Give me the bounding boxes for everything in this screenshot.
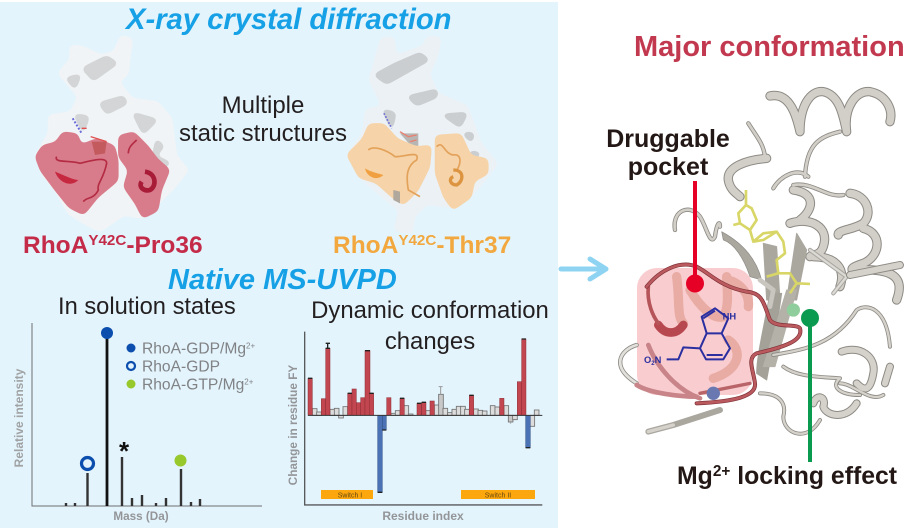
chart: change in residue FY bars: [286, 332, 542, 523]
label: RhoA Y42C-Pro36: RhoAY42C-Pro36: [23, 232, 203, 259]
pointer: druggable pocket: [686, 181, 704, 292]
inhibitor molecule: NH: [723, 312, 736, 322]
axis label: Mass (Da): Mass (Da): [113, 510, 169, 523]
chart: mass spectrum: [12, 323, 262, 523]
axis label: Residue index: Residue index: [382, 509, 464, 523]
heading: In solution states: In solution states: [58, 294, 236, 320]
label: Mg2+ locking effect: Mg2+ locking effect: [677, 463, 897, 490]
inhibitor molecule: [644, 303, 800, 400]
inhibitor molecule: N: [655, 355, 662, 365]
pocket highlight: [637, 268, 753, 395]
label bar: Switch II: [461, 490, 535, 500]
panel: methods background: [0, 2, 558, 528]
heading: Dynamic conformation changes: changes: [385, 328, 475, 355]
marker: star: *: [119, 436, 130, 466]
label: Druggable pocket: pocket: [628, 153, 708, 181]
protein structure: major conformation ribbon: [620, 92, 900, 434]
grey ribbons lower: [620, 265, 900, 434]
text: multiple static structures: Multiple: [222, 92, 304, 119]
legend: RhoA-GDP/Mg: [142, 340, 246, 358]
legend: [126, 340, 255, 394]
ligand: yellow GDP sticks: [733, 190, 810, 293]
legend: 2+: [244, 378, 254, 386]
protein structure: RhoA Y42C-Pro36 surface: [37, 37, 187, 230]
label: RhoA Y42C-Thr37: RhoAY42C-Thr37: [333, 232, 511, 259]
legend: 2+: [246, 342, 255, 350]
label: Druggable pocket: Druggable: [606, 125, 730, 153]
marker: GDP/Mg2+ peak: [101, 327, 113, 339]
pocket pale ribbons: [637, 265, 800, 403]
grey ribbons upper: [675, 92, 899, 300]
arrow: to major conformation: [561, 259, 606, 279]
inhibitor molecule: O: [644, 355, 651, 365]
marker: GTP/Mg2+ peak: [174, 454, 186, 466]
label bar: Switch II: Switch II: [485, 492, 511, 500]
legend: RhoA-GDP: [142, 358, 220, 376]
pointer: Mg2+ locking: [801, 309, 819, 462]
title: X-ray crystal diffraction: X-ray crystal diffraction: [126, 4, 452, 36]
label bar: Switch I: [321, 490, 373, 500]
inhibitor molecule: 2: [651, 361, 655, 367]
legend: RhoA-GTP/Mg: [142, 376, 244, 394]
label bar: Switch I: Switch I: [338, 492, 362, 500]
title: Native MS-UVPD: Native MS-UVPD: [168, 264, 397, 296]
heading: Dynamic conformation changes: Dynamic conformation: [311, 297, 549, 324]
title: Major conformation: Major conformation: [634, 31, 905, 63]
marker: GDP peak: [82, 458, 94, 470]
axis label: Relative intensity: Relative intensity: [12, 368, 26, 467]
text: multiple static structures: [179, 92, 347, 147]
heading: Dynamic conformation changes: [311, 297, 549, 355]
axis label: Change in residue FY: Change in residue FY: [286, 365, 300, 485]
text: multiple static structures: static structures: [179, 120, 347, 147]
label: Druggable pocket: [606, 125, 730, 181]
protein structure: RhoA Y42C-Thr37 surface: [348, 37, 497, 233]
